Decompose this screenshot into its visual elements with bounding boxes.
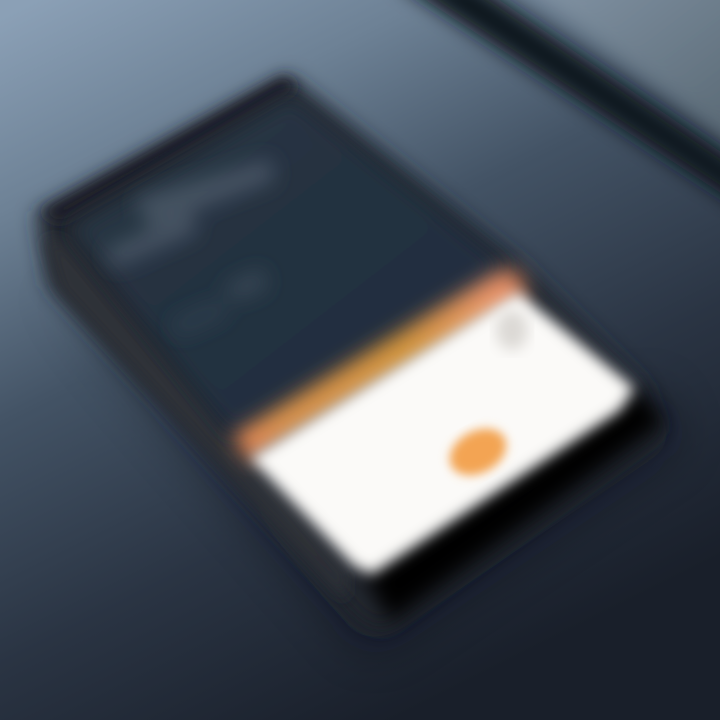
phone left edge (44, 240, 345, 600)
phone dark screen (70, 96, 510, 436)
lower text blur (170, 298, 228, 338)
phone body (36, 76, 662, 630)
grey icon blur (496, 310, 528, 350)
orange band (232, 270, 526, 462)
small text blur (225, 268, 268, 302)
top right lighter corner (500, 0, 720, 160)
phone bottom edge (365, 390, 665, 622)
sub heading line blur (105, 212, 198, 268)
orange button (442, 419, 514, 485)
white screen panel (250, 292, 634, 574)
dark diagonal object top right (395, 0, 720, 212)
screen text highlights (105, 158, 275, 338)
heading line blur (135, 158, 275, 228)
phone top edge (40, 76, 298, 222)
phone shadow (40, 280, 680, 650)
